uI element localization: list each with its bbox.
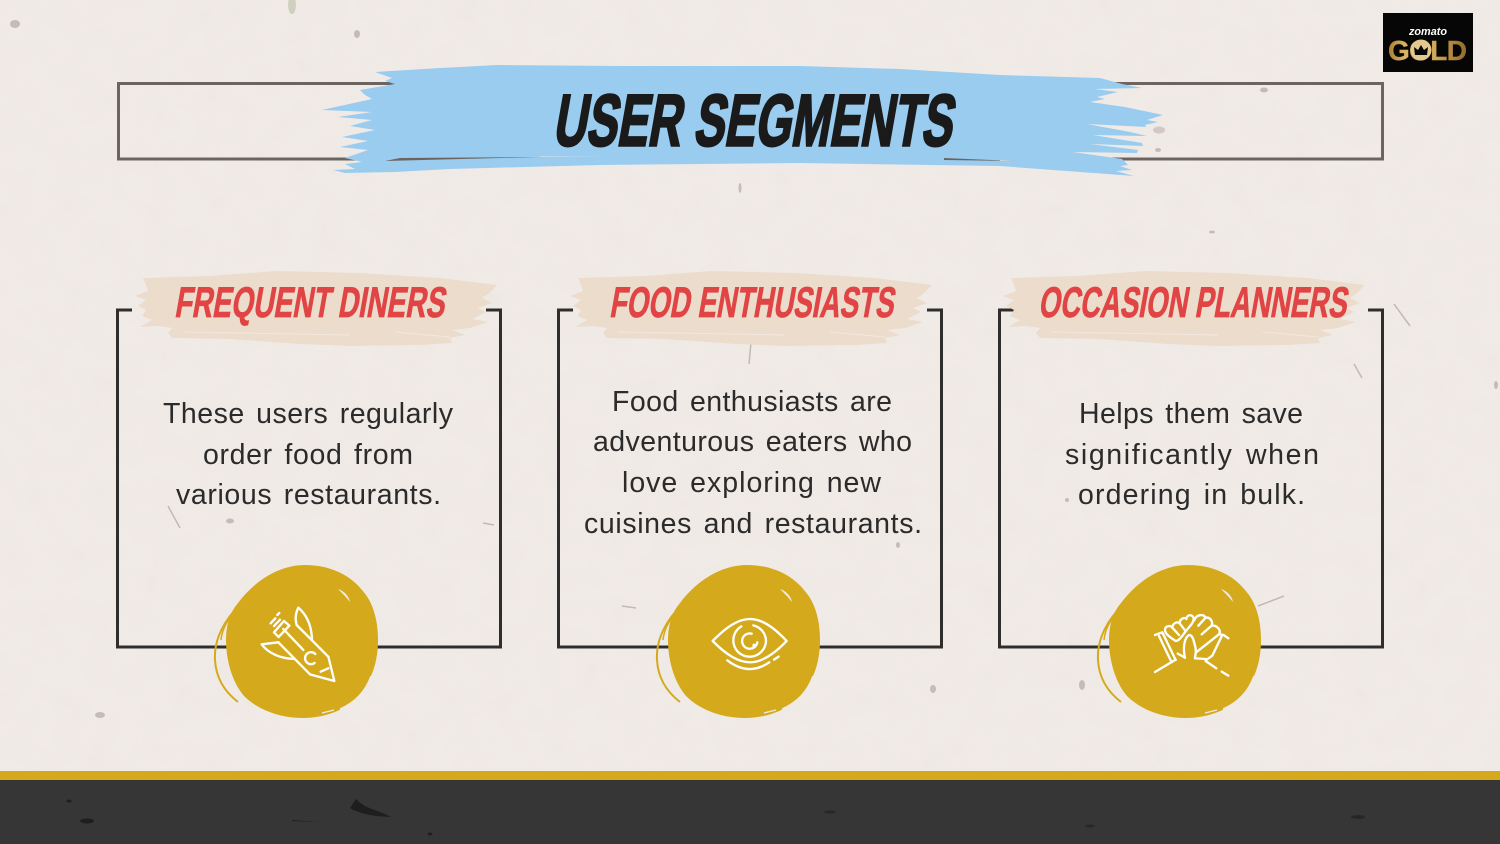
heading: food enthusiasts: FOOD ENTHUSIASTS bbox=[607, 279, 900, 327]
heading brush bbox=[570, 271, 932, 346]
panel frame bbox=[118, 310, 500, 647]
heading brush bbox=[135, 271, 497, 346]
footer gold stripe bbox=[0, 771, 1500, 780]
title frame bbox=[118, 84, 1382, 159]
description text bbox=[584, 386, 922, 540]
footer dark band bbox=[0, 780, 1500, 844]
heading: frequent diners: FREQUENT DINERS bbox=[172, 279, 451, 327]
description text: order food from bbox=[203, 439, 413, 471]
title brush stroke bbox=[322, 65, 1163, 176]
logo: zomato gold: GOLD bbox=[1388, 35, 1467, 66]
heading brush bbox=[1003, 271, 1365, 346]
panel: occasion planners bbox=[1000, 271, 1382, 718]
panel: food enthusiasts bbox=[558, 271, 942, 718]
description text: love exploring new bbox=[622, 467, 881, 499]
description text: ordering in bulk. bbox=[1078, 479, 1305, 511]
icon: rocket badge bbox=[215, 565, 378, 718]
logo: zomato gold: zomato bbox=[1408, 26, 1447, 38]
panel: frequent diners bbox=[118, 271, 500, 718]
description text: adventurous eaters who bbox=[593, 426, 912, 458]
description text: Helps them save bbox=[1079, 398, 1303, 430]
logo: zomato gold bbox=[1383, 13, 1473, 72]
description text: These users regularly bbox=[163, 398, 454, 430]
description text: significantly when bbox=[1065, 439, 1319, 471]
description text bbox=[1065, 398, 1319, 511]
description text: cuisines and restaurants. bbox=[584, 508, 922, 540]
icon: eye badge bbox=[657, 565, 820, 718]
panel frame bbox=[558, 310, 942, 647]
title: USER SEGMENTS bbox=[549, 79, 963, 161]
icon: handshake badge bbox=[1098, 565, 1261, 718]
panel frame bbox=[1000, 310, 1382, 647]
description text: various restaurants. bbox=[176, 479, 441, 511]
description text bbox=[163, 398, 454, 511]
description text: Food enthusiasts are bbox=[612, 386, 892, 418]
